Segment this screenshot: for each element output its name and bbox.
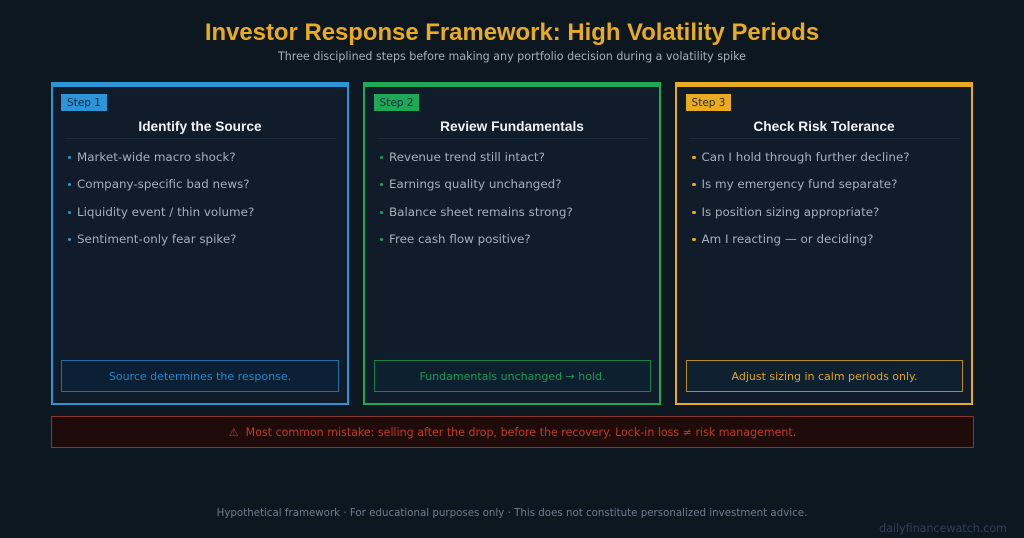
question 4: Am I reacting — or deciding? [702, 232, 873, 246]
subtitle: Three disciplined steps before making any portfolio decision during a volatility spike [278, 50, 746, 63]
badge: step 2 [374, 94, 419, 111]
panel: step 1 identify the source [51, 82, 349, 405]
callout: adjust sizing: Adjust sizing in calm periods only. [732, 370, 918, 383]
badge: step 1 [61, 94, 107, 111]
callout: fundamentals unchanged [374, 360, 651, 392]
callout: fundamentals unchanged: Fundamentals unchanged → hold. [419, 370, 606, 383]
question 1: Revenue trend still intact? [389, 150, 545, 164]
panel heading: review fundamentals: Review Fundamentals [440, 119, 584, 134]
badge: step 3 [686, 94, 731, 111]
title: Investor Response Framework: High Volatility Periods [205, 19, 819, 46]
badge: step 1: Step 1 [67, 97, 101, 109]
badge: step 2: Step 2 [380, 97, 413, 109]
panel heading: identify the source: Identify the Source [138, 119, 262, 134]
question 1: Can I hold through further decline? [702, 150, 910, 164]
question 3: Liquidity event / thin volume? [77, 205, 254, 219]
panel: step 3 check risk tolerance [675, 82, 973, 405]
question 4: Sentiment-only fear spike? [77, 232, 236, 246]
question 1: Market-wide macro shock? [77, 150, 236, 164]
callout: source determines response: Source determines the response. [109, 370, 291, 383]
callout: adjust sizing [686, 360, 963, 392]
warning banner: ⚠ Most common mistake: selling after the drop, before the recovery. Lock-in loss ≠ risk management. [229, 426, 796, 439]
badge: step 3: Step 3 [692, 97, 725, 109]
panel: step 2 review fundamentals [363, 82, 661, 405]
question 2: Is my emergency fund separate? [702, 177, 897, 191]
watermark: dailyfinancewatch.com [879, 522, 1007, 535]
question 2: Company-specific bad news? [77, 177, 250, 191]
question 4: Free cash flow positive? [389, 232, 531, 246]
question 3: Is position sizing appropriate? [702, 205, 879, 219]
warning banner [51, 416, 974, 448]
panel heading: check risk tolerance: Check Risk Tolerance [753, 119, 895, 134]
question 3: Balance sheet remains strong? [389, 205, 573, 219]
question 2: Earnings quality unchanged? [389, 177, 562, 191]
callout: source determines response [61, 360, 339, 392]
footer disclaimer: Hypothetical framework · For educational purposes only · This does not constitute personalized investment advice. [217, 507, 807, 519]
